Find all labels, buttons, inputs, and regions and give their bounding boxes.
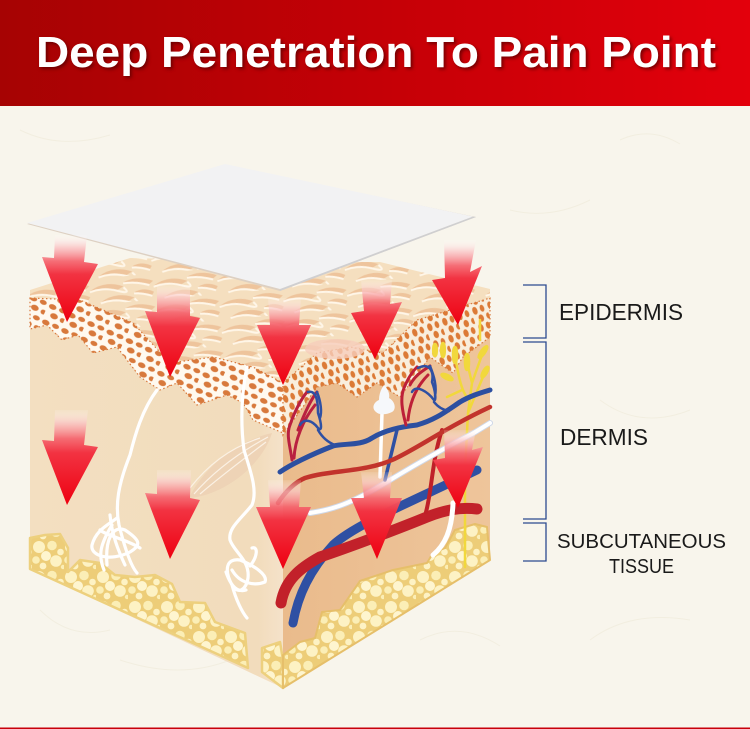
left capillary tuft	[288, 392, 317, 460]
large vein	[293, 470, 477, 623]
arrow 9	[351, 472, 402, 559]
left face fat cells	[30, 534, 283, 688]
top surface scales	[30, 258, 490, 385]
blood vessels and nerves	[278, 320, 490, 623]
muscle	[189, 433, 272, 498]
white gland	[373, 385, 395, 414]
skin cross-section block	[30, 258, 490, 688]
header banner	[0, 0, 750, 106]
arrow 10	[433, 430, 483, 508]
arrow 8	[256, 480, 311, 569]
right face dermis	[283, 298, 490, 688]
arrow 2	[145, 285, 200, 377]
subcutaneous bracket	[523, 523, 546, 561]
subcutaneous tissue label	[557, 531, 726, 578]
dermis label: DERMIS	[560, 424, 648, 450]
dermis bracket	[523, 342, 546, 519]
artery branch	[426, 430, 442, 512]
layer labels	[523, 285, 726, 578]
gland stem	[380, 413, 382, 477]
white nerve	[310, 423, 490, 513]
lower white nerve	[433, 503, 453, 555]
arrow 4	[351, 280, 402, 359]
arteriole	[278, 407, 490, 503]
medicated patch	[27, 164, 476, 291]
arrow 5	[432, 240, 482, 325]
epidermis bracket	[523, 285, 546, 338]
large artery	[281, 508, 477, 603]
pink glow on skin	[305, 339, 365, 359]
subcutaneous tissue label: TISSUE	[609, 556, 674, 578]
subcutaneous tissue label: SUBCUTANEOUS	[557, 531, 726, 553]
arrow 7	[145, 470, 200, 559]
bottom red rule	[0, 728, 750, 729]
right capillary tuft	[402, 366, 430, 425]
blue vein branch	[385, 430, 397, 480]
venule	[280, 390, 490, 472]
left face dermis	[30, 296, 283, 688]
right face fat cells	[283, 524, 490, 688]
arrow 6	[42, 410, 98, 505]
arrow 3	[257, 298, 311, 385]
right epidermis cell layer	[283, 298, 490, 435]
yellow nerve	[433, 320, 490, 567]
left epidermis cell layer	[30, 298, 283, 433]
arrow 1	[42, 235, 98, 322]
nerve fibres with coils	[92, 367, 265, 618]
epidermis label: EPIDERMIS	[559, 299, 683, 325]
title: Deep Penetration To Pain Point	[36, 28, 716, 77]
heat penetration arrows	[42, 235, 483, 569]
